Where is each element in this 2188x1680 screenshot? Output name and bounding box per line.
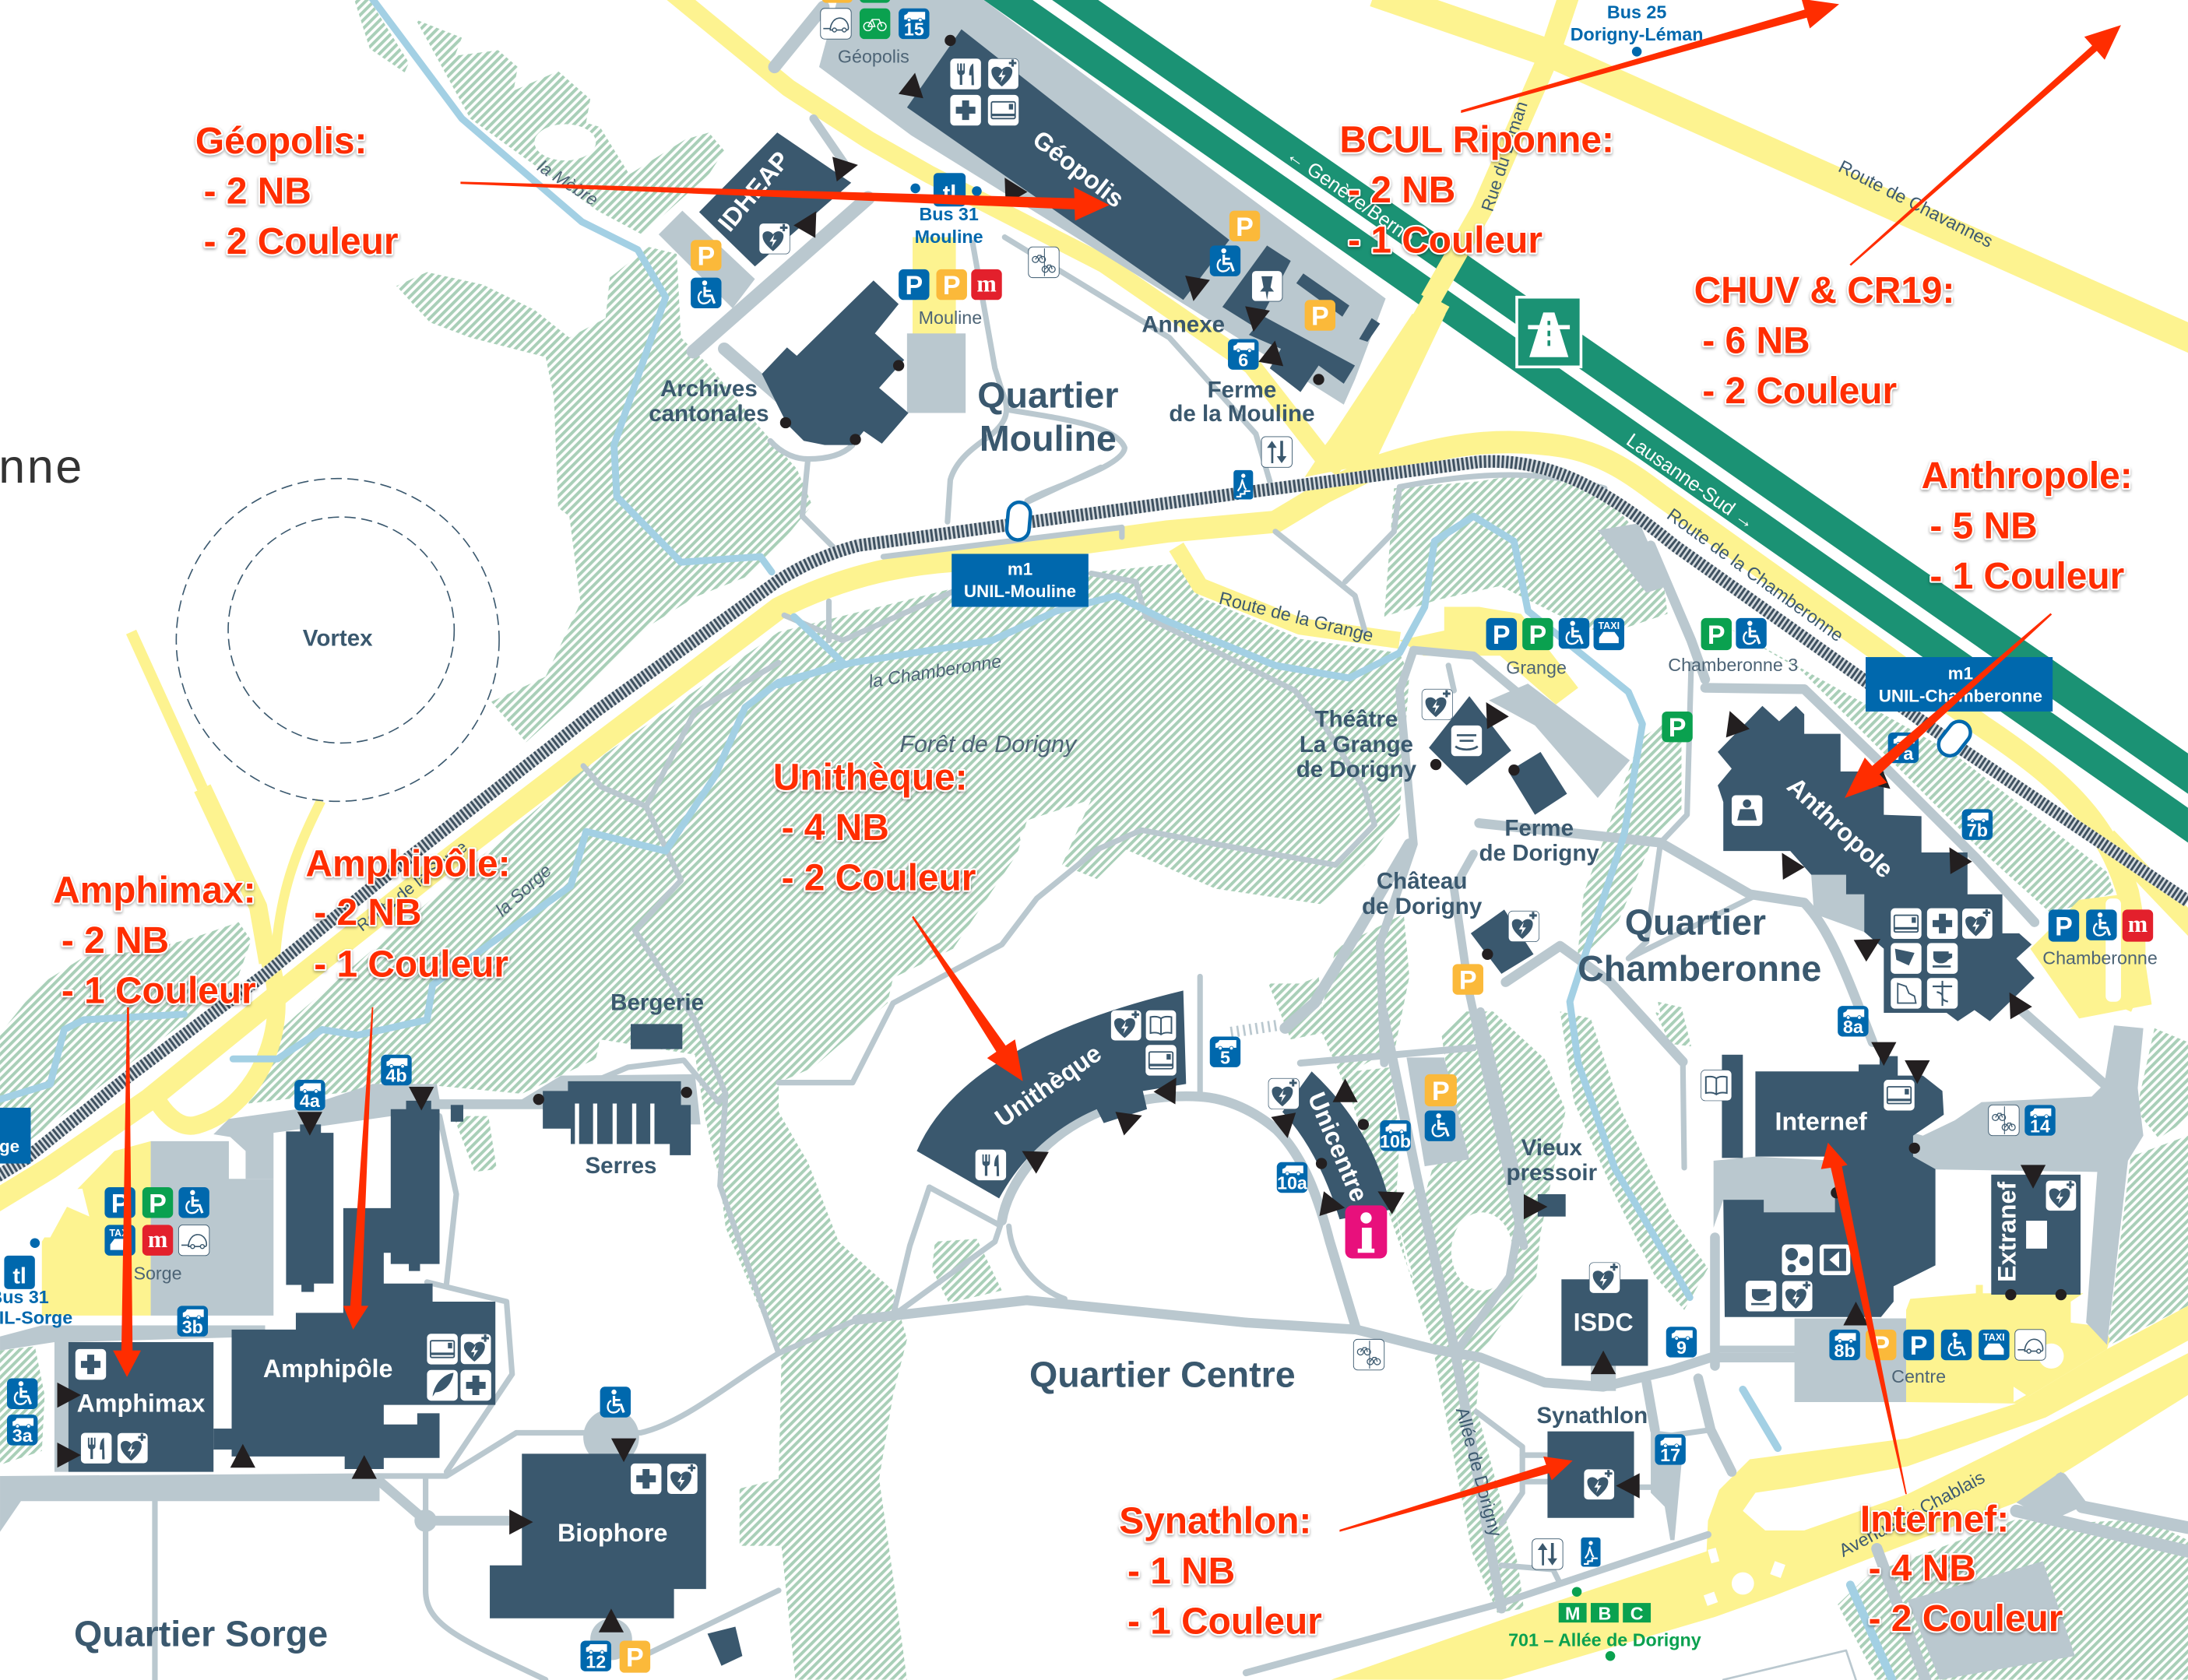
external building labels: de Dorigny (1296, 757, 1417, 782)
annotation: Unithèque: Unithèque: (773, 757, 968, 798)
annotation: Internef (1860, 1499, 2063, 1640)
icons: Théâtre and Château (1422, 689, 1539, 996)
icons: delivery Amphi: 3b (182, 1316, 203, 1337)
external building labels: de Dorigny (1362, 894, 1483, 919)
icons: Théâtre and Château: P (1459, 966, 1477, 996)
building: Géopolis (907, 30, 1229, 300)
annotation: Amphipôle: - 1 Couleur (314, 944, 508, 985)
annotation: Synathlon: - 1 NB (1127, 1551, 1235, 1592)
icons: Chamberonne 3 parking: P (1669, 713, 1686, 743)
building names: Géopolis (1028, 125, 1130, 213)
forest clearings (534, 124, 1513, 1291)
building: Biophore (490, 1453, 706, 1618)
arrow: Internef (1821, 1143, 1907, 1494)
building names: Extranef (1993, 1182, 2021, 1282)
road and river names: Route de la Sorge (353, 838, 471, 935)
icons: Chamberonne 3 parking (1662, 618, 1767, 743)
icon: MBC logo: B (1598, 1604, 1611, 1624)
road and river names: Route de la Grange (1217, 588, 1376, 645)
road and river names: Rue du Léman (1478, 99, 1532, 214)
external building labels: Théâtre (1315, 707, 1398, 733)
external building labels: Vieux (1521, 1135, 1583, 1161)
annotation: Anthropole (1922, 455, 2133, 597)
transit labels: Mouline (915, 227, 983, 247)
building names: Biophore (558, 1519, 668, 1547)
icons: Extranef AED (2046, 1180, 2077, 1211)
icons: ISDC and Synathlon: 17 (1660, 1445, 1680, 1465)
annotation: CHUV and CR19: CHUV & CR19: (1694, 270, 1954, 311)
building: Serres (543, 1081, 691, 1155)
annotation: Unithèque: - 2 Couleur (782, 857, 976, 898)
icons: Sorge cluster: P (149, 1189, 167, 1218)
annotation: Amphipôle: - 2 NB (314, 892, 421, 933)
road and river names: Lausanne-Sud → (1623, 429, 1760, 534)
transit labels (0, 2, 1703, 1650)
icons: delivery 7a 7b 8a (1838, 733, 1993, 1037)
transit labels: Dorigny-Léman (1571, 24, 1703, 44)
arrow: CHUV and CR19 (1849, 25, 2121, 265)
road and river names: la Mèbre (534, 156, 602, 209)
icons: IDHEAP: P (697, 241, 715, 271)
label: Vortex: Vortex (303, 626, 373, 652)
icons: Unithèque services (976, 1010, 1177, 1180)
annotation: Amphimax: Amphimax: (53, 870, 256, 911)
icons: Grange parking: P (1493, 620, 1511, 650)
road and river names: Forêt de Dorigny (899, 731, 1078, 757)
icons: delivery 7a 7b 8a: 7a (1893, 743, 1914, 764)
small place labels: Géopolis (838, 47, 909, 67)
annotation: Anthropole: Anthropole: (1922, 455, 2133, 497)
building: Château de Dorigny (1471, 909, 1533, 974)
building: Ferme de la Mouline (1249, 317, 1380, 392)
station: m1 Mouline marker (952, 501, 1089, 607)
icons: delivery Amphi: 3a (12, 1425, 33, 1446)
building: IDHEAP (699, 132, 851, 266)
icons: Mouline parking: P (943, 271, 961, 301)
external building labels: Archives (660, 376, 758, 402)
icons: Biophore: 12 (586, 1651, 606, 1671)
icons: Chamberonne 3 parking: P (1708, 620, 1725, 650)
connector between Amphimax and Amphipôle (213, 1429, 233, 1450)
building names: IDHEAP (712, 146, 795, 237)
external building labels (585, 312, 1648, 1429)
building: Anthropole (1718, 706, 2035, 1021)
icons: Internef (1701, 1070, 2056, 1312)
icons: Mouline parking: P (905, 271, 923, 301)
small place labels: Grange (1506, 658, 1567, 678)
building: Amphimax (69, 1342, 213, 1472)
annotation: CHUV and CR19 (1694, 270, 1954, 412)
quarter names: Mouline (980, 418, 1117, 459)
annotation: BCUL Riponne (1339, 119, 1614, 261)
road and river names: Route de la Chamberonne (1663, 504, 1847, 645)
external building labels: Serres (585, 1153, 656, 1179)
road and river names: la Chamberonne (867, 651, 1003, 691)
icons: elevator and stairs Mouline (1233, 437, 1292, 500)
icons: Unicentre area (1210, 1037, 1457, 1370)
icons: Centre parking row: P (1910, 1331, 1927, 1361)
small place labels: Centre (1891, 1366, 1946, 1387)
building: Amphipôle complex (232, 1101, 495, 1469)
station: m1 Chamberonne marker: m1 (1948, 664, 1973, 684)
station: m1 Mouline marker: m1 (1008, 559, 1032, 578)
building names: Amphipôle (263, 1355, 392, 1383)
small place labels (133, 47, 2158, 1387)
icon: bike parking Mouline (1029, 247, 1059, 278)
annotation: Géopolis (195, 121, 398, 262)
building: ISDC (1561, 1279, 1648, 1365)
arrow: BCUL Riponne (1461, 0, 1839, 113)
external building labels: de la Mouline (1169, 401, 1315, 427)
icons: delivery Amphi: 4a (300, 1091, 321, 1111)
building: Vieux pressoir (1538, 1194, 1566, 1217)
annotation: Amphipôle (305, 843, 511, 985)
icons: Unicentre area: 10b (1380, 1131, 1411, 1151)
motorway (983, 0, 2188, 842)
road and river names: ← Genève/Berne (1282, 143, 1419, 248)
icons: Géopolis parking cluster (821, 0, 930, 40)
small place labels: Mouline (919, 308, 982, 328)
cut-off title fragment: nne (0, 440, 84, 493)
icons: delivery Amphi (7, 1055, 412, 1446)
external building labels: de Dorigny (1479, 841, 1599, 866)
external building labels: Château (1377, 869, 1467, 894)
icons: Sorge cluster: P (111, 1189, 128, 1218)
icon: tl bus Sorge (4, 1238, 40, 1289)
icons: IDHEAP (691, 223, 790, 308)
icon: tl bus Sorge: tl (12, 1264, 26, 1289)
external building labels: Ferme (1208, 378, 1276, 403)
icons: Chamberonne parking: m (2128, 911, 2148, 937)
road islands (39, 898, 2188, 1606)
annotation: Anthropole: - 5 NB (1929, 506, 2038, 547)
icon: MBC logo: C (1630, 1604, 1644, 1624)
building: Internef annex bar (1722, 1055, 1743, 1158)
icons: Unicentre area: 5 (1220, 1047, 1230, 1067)
annotation: BCUL Riponne: - 1 Couleur (1348, 220, 1543, 261)
icons: ISDC and Synathlon: 9 (1676, 1337, 1687, 1358)
icons: Centre parking row: 8b (1834, 1341, 1856, 1361)
icons: Chamberonne parking (2049, 909, 2153, 942)
road and river names: Allée de Dorigny (1452, 1405, 1506, 1539)
icons: Biophore: P (626, 1643, 644, 1673)
building: Annexe (1222, 245, 1349, 328)
building names: Unicentre (1303, 1088, 1374, 1206)
arrow: Amphipôle (343, 1007, 373, 1330)
annotation: Anthropole: - 1 Couleur (1929, 556, 2124, 597)
annotation: Internef: Internef: (1860, 1499, 2009, 1541)
icons: Grange parking: TAXI (1598, 620, 1620, 631)
icon: information (1346, 1205, 1387, 1258)
quarter names: Quartier Sorge (74, 1614, 328, 1654)
icon: MBC logo: M (1565, 1604, 1580, 1624)
building: Unicentre (1282, 1071, 1391, 1219)
icons: Centre parking row (1829, 1330, 2046, 1361)
annotation: Internef: - 4 NB (1869, 1548, 1976, 1589)
arrow: Géopolis (460, 181, 1110, 220)
building: Synathlon (1547, 1432, 1634, 1518)
quarter names (74, 374, 1821, 1654)
road and river names: Route de Chavannes (1835, 156, 1996, 251)
transit labels: Bus 31 (919, 204, 979, 224)
icon: tl bus Mouline (910, 173, 982, 206)
icon: MBC logo (1559, 1587, 1651, 1661)
external building labels: Synathlon (1536, 1403, 1648, 1429)
small dark building south (708, 1627, 742, 1666)
icons: Sorge cluster: m (148, 1226, 167, 1253)
building: Extranef (1991, 1175, 2081, 1295)
annotation: Géopolis: - 2 Couleur (204, 221, 398, 262)
icon: tl bus Mouline: tl (943, 181, 956, 206)
annotation: Géopolis: - 2 NB (204, 171, 311, 213)
transit labels: Bus 25 (1607, 2, 1666, 22)
building names: Amphimax (77, 1390, 206, 1418)
road and river names (353, 99, 1996, 1561)
icons: Amphipôle services (427, 1334, 491, 1401)
icons: delivery 7a 7b 8a: 7b (1967, 820, 1988, 840)
annotation: Géopolis: Géopolis: (195, 121, 367, 162)
annotation: Synathlon (1119, 1500, 1322, 1643)
icons: delivery Amphi: 4b (385, 1066, 407, 1086)
quarter names: Quartier (1625, 902, 1766, 943)
annotation: BCUL Riponne: BCUL Riponne: (1339, 119, 1614, 160)
icons: Sorge cluster: TAXI (109, 1228, 131, 1239)
annotation: Internef: - 2 Couleur (1869, 1598, 2063, 1640)
icons: Unicentre area: 10a (1277, 1173, 1308, 1193)
icons: Centre parking row: TAXI (1983, 1332, 2005, 1343)
annotation: Unithèque: - 4 NB (782, 807, 889, 849)
motorway icon (1517, 297, 1581, 367)
small place labels: Chamberonne 3 (1668, 655, 1798, 675)
station: m1 Sorge box (0, 1108, 30, 1164)
icons: Biophore (581, 1387, 698, 1673)
external building labels: Bergerie (610, 989, 704, 1015)
external building labels: cantonales (649, 401, 769, 427)
external building labels: La Grange (1300, 732, 1413, 757)
small place labels: Sorge (133, 1263, 182, 1283)
building: Archives cantonales (762, 280, 909, 445)
station: m1 Mouline marker: UNIL-Mouline (964, 582, 1076, 601)
building names: Unithèque (990, 1039, 1106, 1132)
icons: Géopolis east parking: 6 (1238, 350, 1248, 370)
arrow: Amphimax (113, 1007, 141, 1377)
small square near Serres (451, 1105, 463, 1122)
entrance dots (533, 35, 2067, 1300)
annotation: CHUV and CR19: - 6 NB (1702, 320, 1810, 361)
external building labels: Annexe (1141, 312, 1225, 338)
icons: Amphimax services (76, 1349, 148, 1464)
vortex circles (176, 479, 499, 801)
icons: Géopolis parking cluster: 15 (904, 19, 924, 40)
annotation: Amphimax: - 2 NB (62, 920, 169, 961)
quarter names: Chamberonne (1578, 948, 1821, 989)
building names: Anthropole (1782, 771, 1899, 884)
icons: Mouline parking: m (976, 271, 997, 297)
icons: Géopolis east parking: P (1236, 213, 1254, 242)
annotation: Synathlon: Synathlon: (1119, 1500, 1311, 1541)
yellow roads (0, 0, 2188, 1207)
icons: delivery 7a 7b 8a: 8a (1843, 1017, 1864, 1037)
icons: ISDC and Synathlon (1532, 1263, 1697, 1569)
icons: Centre parking row: P (1872, 1331, 1890, 1361)
railway (0, 462, 2188, 1183)
icons: Unicentre area: P (1432, 1077, 1450, 1106)
building: Internef (1723, 1056, 1944, 1317)
arrow: Unithèque (912, 916, 1023, 1081)
external building labels: Ferme (1504, 815, 1574, 841)
building: Unithèque (916, 990, 1186, 1198)
icons: Géopolis east parking: P (1311, 302, 1329, 332)
building: Bergerie (631, 1024, 682, 1049)
road and river names: la Sorge (491, 860, 555, 920)
building names: ISDC (1574, 1309, 1634, 1337)
arrow: Synathlon (1339, 1457, 1573, 1532)
annotation: Amphipôle: Amphipôle: (305, 843, 511, 884)
annotation: Unithèque (773, 757, 976, 898)
quarter names: Quartier Centre (1029, 1354, 1296, 1394)
quarter names: Quartier (977, 374, 1118, 415)
icons: Chamberonne parking: P (2055, 912, 2073, 942)
road and river names: Avenue du Chablais (1835, 1467, 1988, 1561)
icons: Grange parking (1486, 618, 1624, 650)
icons: Mouline parking (899, 269, 1002, 301)
annotation: BCUL Riponne: - 2 NB (1348, 170, 1455, 211)
icons: Géopolis east parking (1210, 211, 1335, 370)
annotation: Amphimax (53, 870, 256, 1011)
building names (77, 125, 2021, 1547)
building: Théâtre La Grange (1429, 696, 1511, 786)
annotation: Amphimax: - 1 Couleur (62, 970, 256, 1011)
building names: Internef (1775, 1108, 1867, 1136)
small place labels: Chamberonne (2042, 947, 2158, 968)
external building labels: pressoir (1506, 1160, 1598, 1186)
station: m1 Chamberonne marker: UNIL-Chamberonne (1879, 686, 2042, 705)
annotation: CHUV and CR19: - 2 Couleur (1702, 371, 1897, 412)
transit labels: 701 – Allée de Dorigny (1508, 1630, 1701, 1650)
icons: Sorge cluster (104, 1187, 209, 1256)
icons: Anthropole services (1732, 795, 1993, 1009)
icons: Grange parking: P (1529, 620, 1546, 650)
icons: Internef: 14 (2030, 1116, 2050, 1136)
annotation: Synathlon: - 1 Couleur (1127, 1601, 1322, 1643)
icons: Géopolis services (950, 58, 1018, 125)
building: Ferme de Dorigny (1508, 752, 1567, 815)
station: m1 Chamberonne marker (1866, 657, 2053, 761)
arrow: Anthropole (1845, 613, 2052, 798)
